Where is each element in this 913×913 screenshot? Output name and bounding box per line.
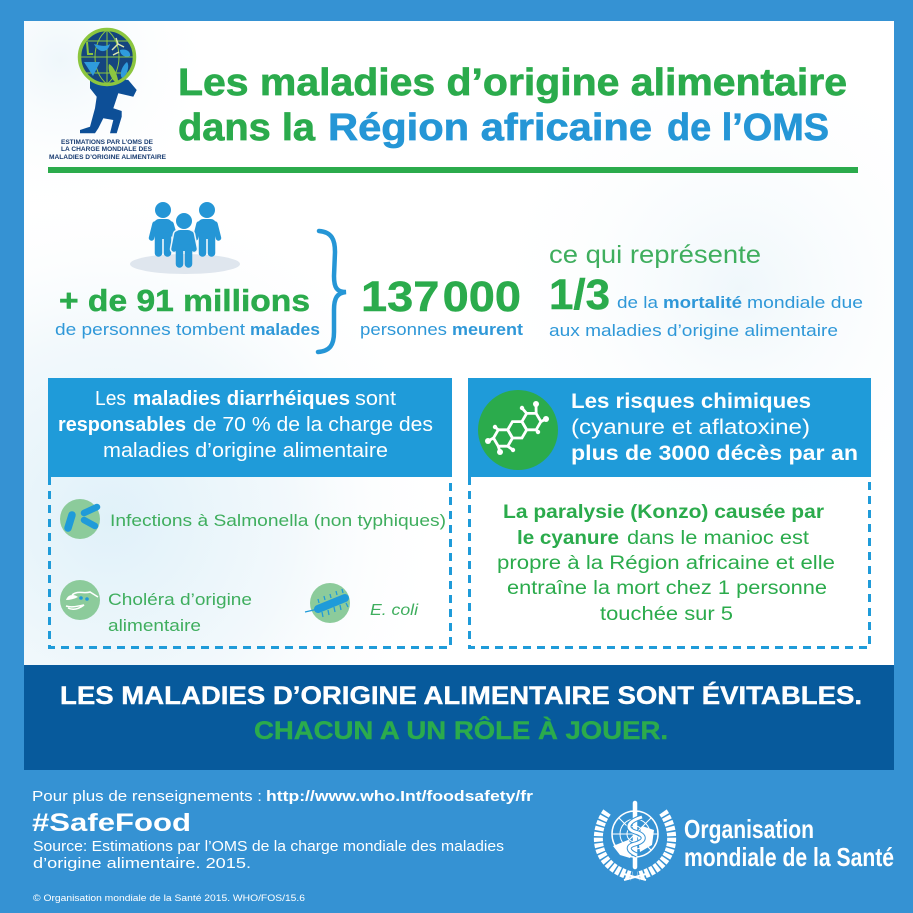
title: de l’OMS	[667, 107, 829, 149]
header text: plus de 3000 décès par an	[571, 442, 858, 465]
stat: one third of mortality	[549, 241, 863, 340]
panel header: diarrhoeal diseases: Les	[95, 388, 126, 410]
title: dans la	[178, 107, 316, 149]
stat: one third of mortality: mortalité	[663, 293, 742, 312]
icon: three people	[130, 202, 240, 274]
icon: salmonella	[60, 499, 100, 539]
header text: (cyanure et aflatoxine)	[571, 416, 810, 439]
stat: one third of mortality: aux maladies d’origine alimentaire	[549, 321, 838, 340]
stat: 137 000 deaths: meurent	[452, 320, 523, 339]
panel header: diarrhoeal diseases: responsables	[58, 414, 186, 436]
main white panel	[24, 21, 894, 666]
panel: diarrhoeal diseases	[48, 378, 452, 648]
WHO wordmark: Organisation	[684, 814, 814, 844]
banner: call to action	[24, 665, 894, 770]
footer text: Pour plus de renseignements :	[32, 788, 262, 805]
footer text	[32, 788, 533, 904]
label: E. coli: E. coli	[370, 602, 418, 619]
icon: WHO emblem	[598, 803, 672, 880]
label: cholera: Choléra d’origine	[108, 590, 252, 609]
dashed frame	[470, 477, 870, 648]
logo caption: LA CHARGE MONDIALE DES	[61, 146, 153, 153]
logo caption: MALADIES D’ORIGINE ALIMENTAIRE	[49, 154, 167, 161]
logo caption	[49, 139, 167, 161]
label: salmonella: Infections à Salmonella (non typhiques)	[110, 511, 446, 530]
konzo text	[497, 502, 835, 625]
panel header: diarrhoeal diseases	[48, 378, 452, 477]
curly brace	[318, 231, 346, 352]
stat: one third of mortality: 1/3	[549, 271, 610, 319]
panel header: chemical hazards	[468, 378, 871, 477]
konzo text: propre à la Région africaine et elle	[497, 553, 835, 574]
stat: 137 000 deaths: personnes	[360, 320, 447, 339]
banner: call to action: CHACUN A UN RÔLE À JOUER.	[254, 715, 668, 745]
footer text: d’origine alimentaire. 2015.	[33, 856, 251, 872]
konzo text: dans le manioc est	[627, 528, 810, 549]
panel header: diarrhoeal diseases: sont	[355, 388, 396, 410]
label: cholera	[108, 590, 252, 635]
konzo text: La paralysie (Konzo) causée par	[503, 502, 825, 523]
stat: one third of mortality: ce qui représente	[549, 241, 761, 269]
konzo text: touchée sur 5	[600, 604, 733, 625]
konzo text: le cyanure	[517, 528, 619, 549]
title	[178, 62, 847, 149]
dashed frame	[50, 477, 450, 648]
footer text: © Organisation mondiale de la Santé 2015. WHO/FOS/15.6	[33, 893, 305, 904]
banner: call to action: LES MALADIES D’ORIGINE ALIMENTAIRE SONT ÉVITABLES.	[60, 681, 862, 710]
stat: 137 000 deaths	[360, 273, 523, 339]
logo caption: ESTIMATIONS PAR L’OMS DE	[61, 139, 154, 146]
title: Les maladies d’origine alimentaire	[178, 62, 847, 104]
panel header: diarrhoeal diseases: maladies d’origine alimentaire	[103, 440, 388, 462]
konzo text: entraîne la mort chez 1 personne	[507, 578, 827, 599]
icon: cholera	[60, 580, 100, 620]
panel header: diarrhoeal diseases: de 70 % de la charge des	[193, 414, 433, 436]
stat: one third of mortality: mondiale due	[747, 293, 863, 312]
panel: chemical hazards	[468, 378, 871, 648]
icon: Atlas figure carrying globe	[80, 30, 137, 133]
panel tint	[24, 21, 894, 666]
title: Région africaine	[328, 107, 652, 149]
icon: E. coli	[305, 583, 350, 623]
stat: one third of mortality: de la	[617, 293, 659, 312]
footer text: #SafeFood	[32, 809, 191, 837]
icon: molecule	[478, 390, 558, 470]
stat: 91 million ill	[55, 283, 320, 339]
panel header: diarrhoeal diseases: maladies diarrhéiques	[133, 388, 350, 410]
stat: 91 million ill: de personnes tombent	[55, 320, 245, 339]
footer text: Source: Estimations par l’OMS de la charge mondiale des maladies	[33, 839, 504, 855]
header text: Les risques chimiques	[571, 390, 811, 413]
footer text: http://www.who.Int/foodsafety/fr	[266, 788, 533, 805]
WHO wordmark	[684, 814, 894, 872]
stat: 91 million ill: + de 91 millions	[59, 283, 310, 318]
stat: 137 000 deaths: 137 000	[361, 273, 521, 321]
stat: 91 million ill: malades	[250, 320, 320, 339]
label: cholera: alimentaire	[108, 616, 201, 635]
header text	[571, 390, 858, 465]
